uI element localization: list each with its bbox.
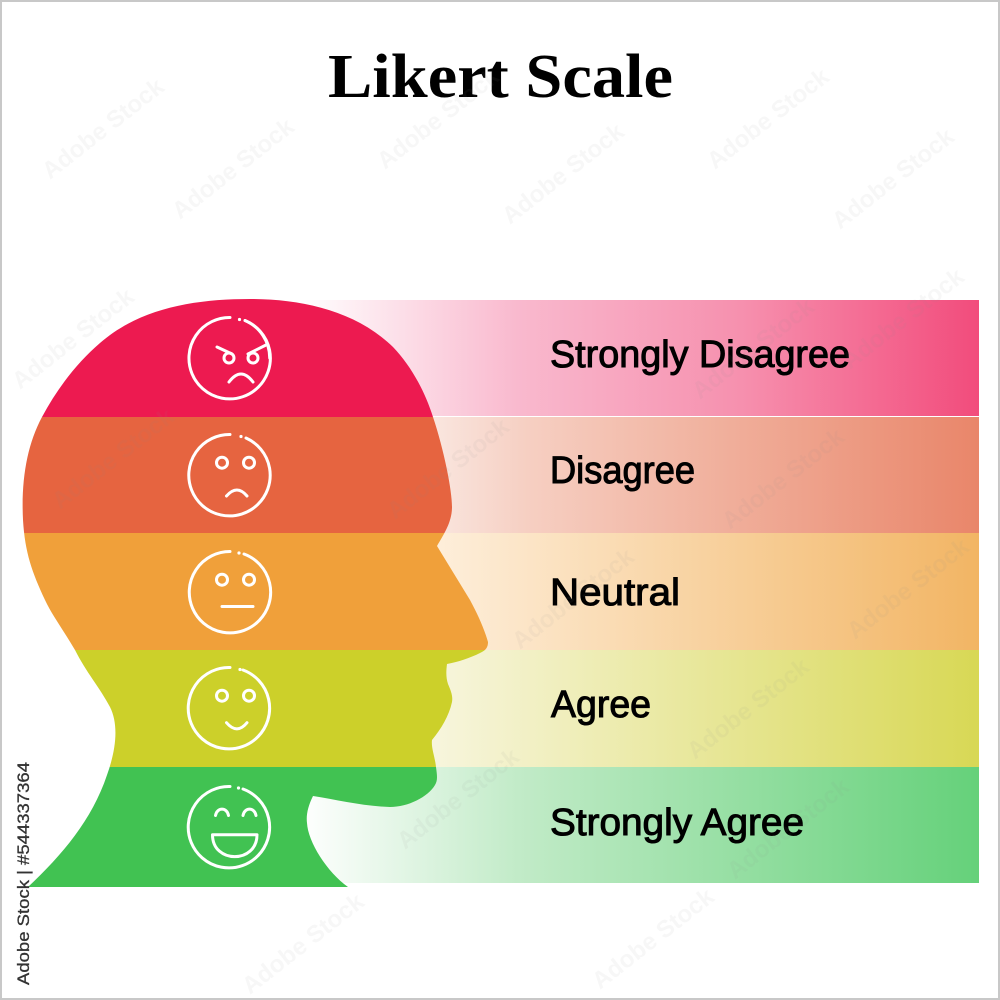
label: Agree: Agree <box>551 684 651 726</box>
title: Likert Scale <box>328 43 673 111</box>
watermark: Adobe Stock pattern: Adobe Stock <box>507 543 640 655</box>
watermark: Adobe Stock pattern: Adobe Stock <box>382 413 515 525</box>
watermark: Adobe Stock pattern: Adobe Stock <box>372 63 505 175</box>
label: Strongly Agree: Strongly Agree <box>550 802 804 844</box>
icon: sad face <box>189 434 270 516</box>
watermark: Adobe Stock pattern: Adobe Stock <box>497 118 630 230</box>
gradient bands <box>300 300 979 883</box>
icon: neutral face <box>189 551 271 633</box>
icon: very happy face <box>188 786 270 868</box>
watermark: Adobe Stock pattern: Adobe Stock <box>682 653 815 765</box>
watermark: Adobe Stock pattern: Adobe Stock <box>167 113 300 225</box>
watermark: Adobe Stock pattern: Adobe Stock <box>587 883 720 995</box>
icon: happy face <box>188 667 270 749</box>
watermark: Adobe Stock pattern: Adobe Stock <box>717 423 850 535</box>
watermark: Adobe Stock pattern: Adobe Stock <box>837 263 970 375</box>
watermark: Adobe Stock pattern: Adobe Stock <box>687 293 820 405</box>
label: Neutral: Neutral <box>550 572 680 614</box>
label: Disagree: Disagree <box>550 450 695 492</box>
watermark: Adobe Stock pattern: Adobe Stock <box>237 888 370 1000</box>
watermark: Adobe Stock pattern: Adobe Stock <box>7 283 140 395</box>
watermark: Adobe Stock pattern: Adobe Stock <box>37 73 170 185</box>
head silhouette <box>0 290 500 892</box>
watermark: Adobe Stock pattern: Adobe Stock <box>392 743 525 855</box>
icon: angry face <box>189 317 270 399</box>
watermark: Adobe Stock pattern: Adobe Stock <box>827 123 960 235</box>
watermark: Adobe Stock pattern: Adobe Stock <box>47 403 180 515</box>
label: Strongly Disagree: Strongly Disagree <box>550 334 850 376</box>
watermark: Adobe Stock pattern: Adobe Stock <box>842 533 975 645</box>
watermark: Adobe Stock pattern: Adobe Stock <box>702 63 835 175</box>
watermark: Adobe Stock pattern: Adobe Stock <box>722 773 855 885</box>
watermark: stock id: Adobe Stock | #544337364 <box>15 762 33 985</box>
